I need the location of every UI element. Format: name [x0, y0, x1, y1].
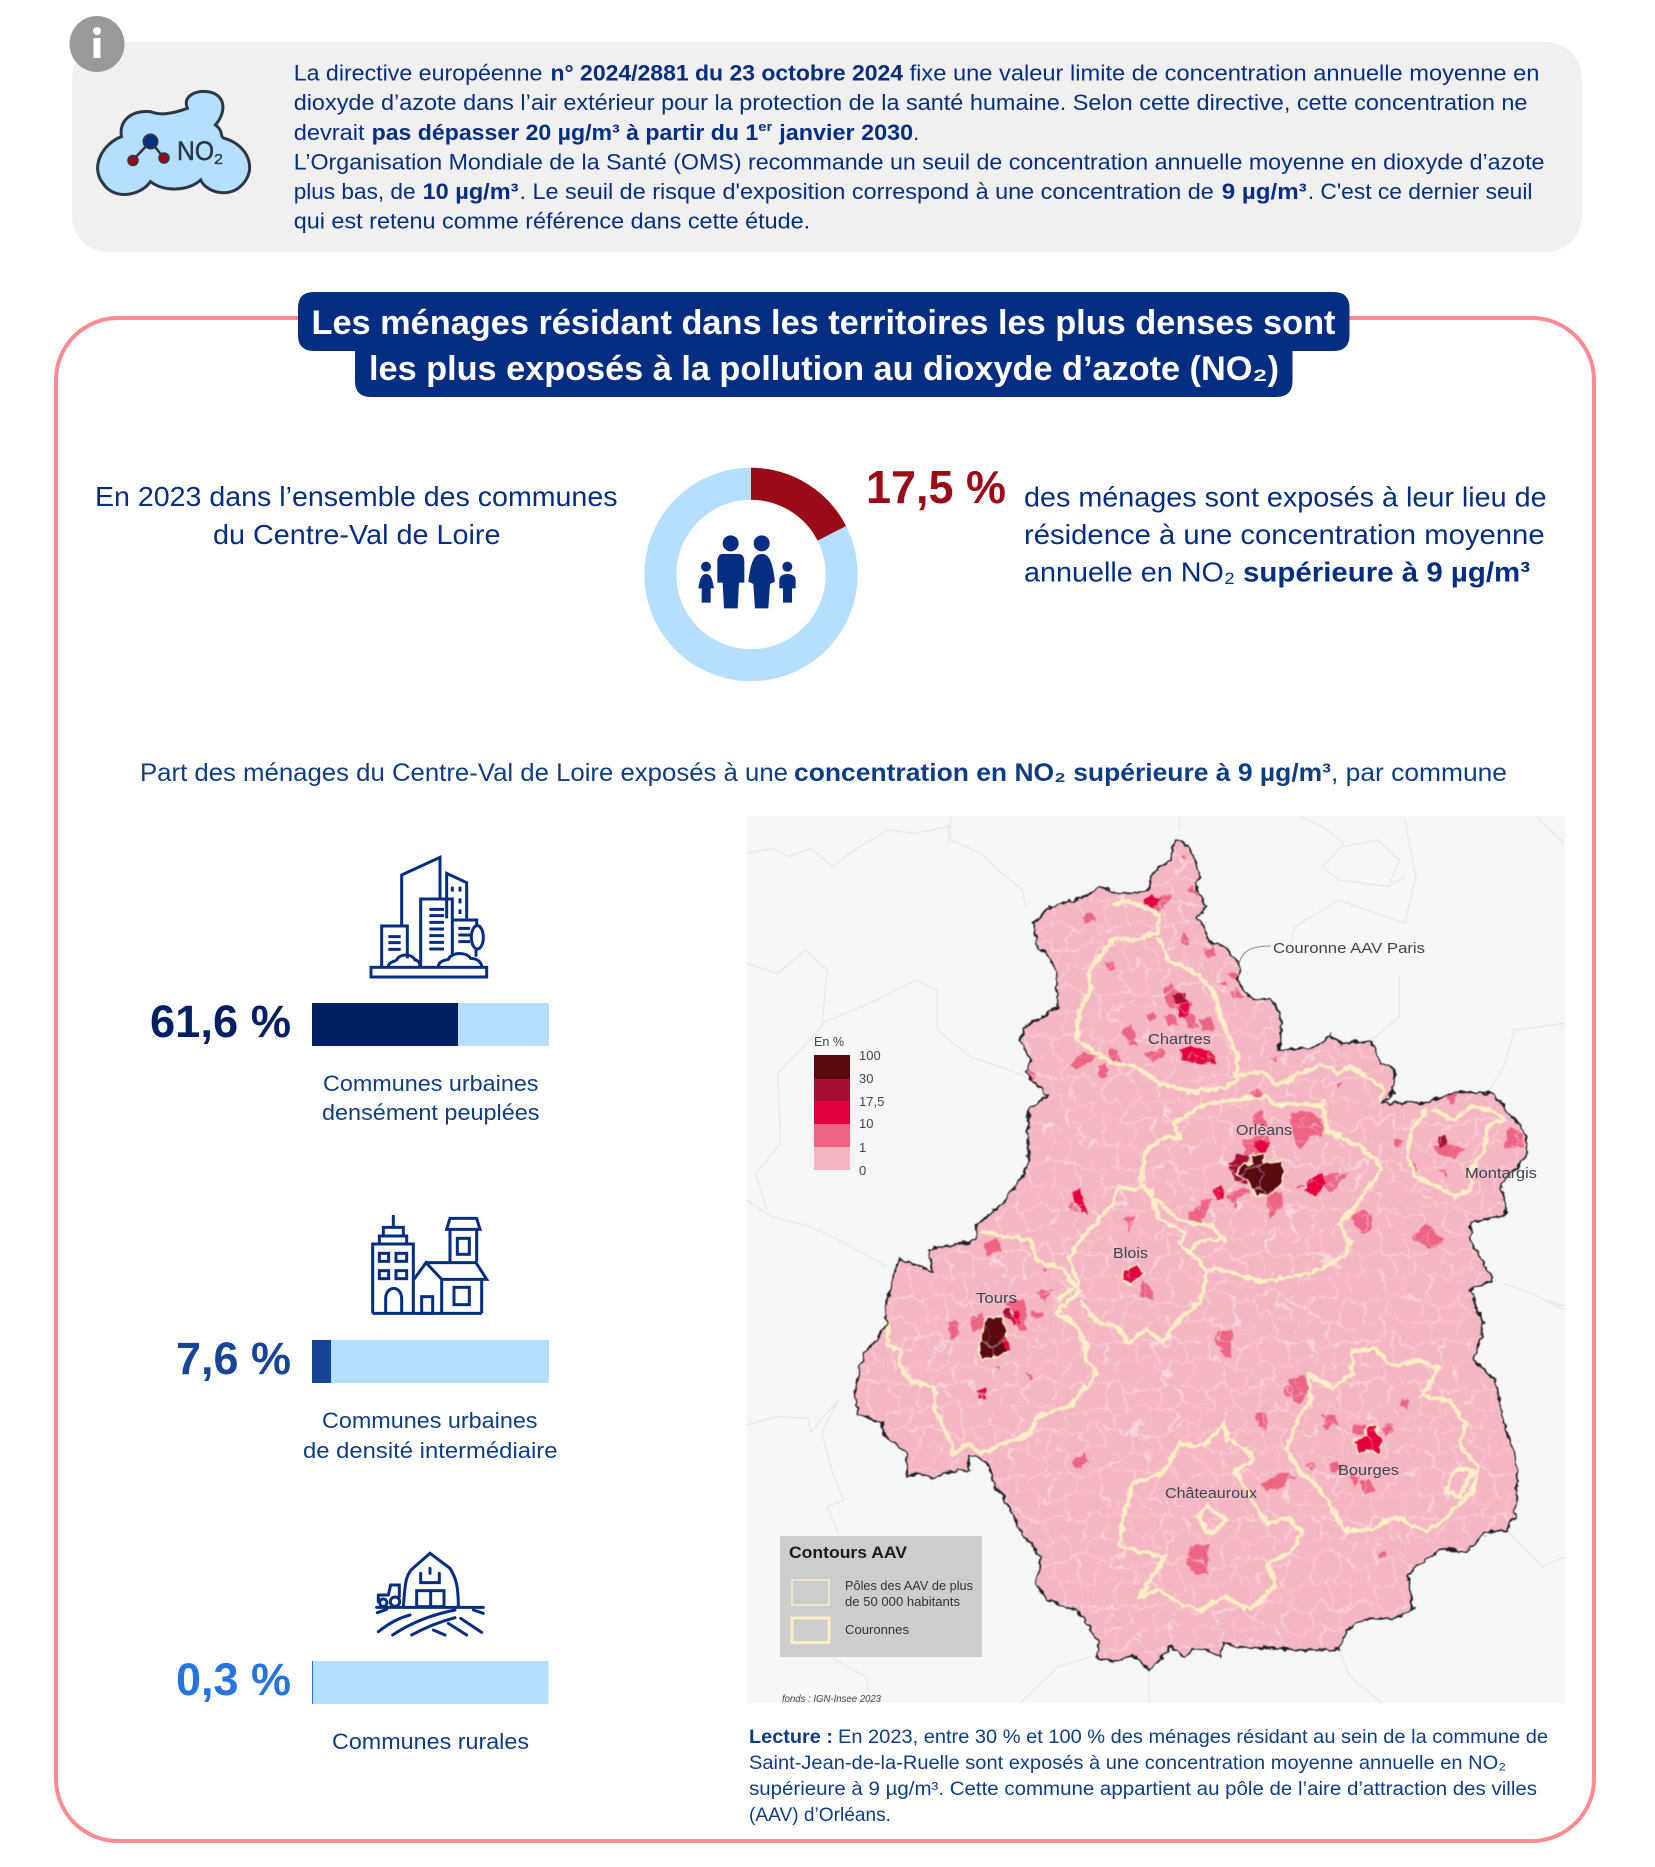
donut chart: 17.5 %: [660, 484, 842, 665]
text: exposure statement: résidence à une concentration moyenne: [1024, 519, 1545, 550]
text: directive explanation: qui est retenu comme référence dans cette étude.: [294, 208, 810, 234]
text: exposure statement: des ménages sont exposés à leur lieu de: [1024, 482, 1547, 512]
text: directive explanation: pas dépasser 20 µg/m³ à partir du 1: [372, 120, 758, 145]
label: Communes rurales: [332, 1729, 529, 1754]
city labels: Orléans: [1236, 1123, 1292, 1139]
map: communes of Centre-Val de Loire: [746, 816, 1565, 1705]
icon: NO2 cloud: NO: [177, 136, 214, 166]
title: les plus exposés à la pollution au dioxyde d’azote (NO₂): [369, 350, 1279, 388]
legend: AAV contours: Pôles des AAV de plus: [845, 1578, 973, 1593]
legend: percentage classes: En %: [814, 1034, 844, 1049]
icon: farm: [377, 1553, 483, 1635]
icon: family: [698, 535, 796, 608]
AAV contours: [888, 900, 1504, 1610]
callout: Couronne AAV Paris: Couronne AAV Paris: [1273, 941, 1425, 957]
legend: AAV contours: Contours AAV: [789, 1543, 908, 1562]
legend: AAV contours: [780, 1536, 982, 1657]
value: 7.6 %: 7,6 %: [176, 1333, 291, 1384]
text: reading note: [749, 1726, 1548, 1826]
bar: 7.6 %: [312, 1340, 549, 1383]
group: intermediate density communes: [176, 1215, 558, 1463]
icon: city: [371, 857, 487, 977]
city labels: Tours: [976, 1291, 1017, 1307]
text: directive explanation: L’Organisation Mondiale de la Santé (OMS) recommande un seuil de concentration annuelle moyenne en dioxyde d’azote: [294, 149, 1544, 175]
panel: main framed section: [56, 318, 1594, 1841]
text: directive explanation: [294, 60, 1544, 234]
label: Communes urbaines: [323, 1071, 538, 1096]
icon: NO2 cloud: [98, 91, 250, 194]
icon: NO2 cloud: 2: [214, 151, 223, 168]
text: regional context: [95, 481, 618, 550]
legend: percentage classes: 100: [859, 1048, 881, 1063]
text: directive explanation: .: [913, 120, 919, 145]
text: reading note: Saint-Jean-de-la-Ruelle sont exposés à une concentration moyenne annuelle en NO₂: [749, 1752, 1506, 1774]
legend: percentage classes: 17,5: [859, 1094, 884, 1109]
subheading: concentration en NO₂ supérieure à 9 µg/m³: [794, 759, 1331, 787]
city labels: Châteauroux: [1165, 1486, 1258, 1502]
text: regional context: En 2023 dans l’ensemble des communes: [95, 481, 618, 512]
text: directive explanation: er: [758, 119, 772, 134]
text: reading note: En 2023, entre 30 % et 100 % des ménages résidant au sein de la commune de: [838, 1726, 1548, 1748]
key figure: 17.5 %: 17,5 %: [866, 461, 1006, 513]
region border: [855, 839, 1526, 1670]
legend: percentage classes: [814, 1034, 884, 1178]
subheading: [140, 759, 1507, 787]
city labels: [976, 1032, 1537, 1502]
text: directive explanation: . C'est ce dernier seuil: [1308, 179, 1532, 204]
source note: fonds : IGN-Insee 2023: [782, 1694, 881, 1705]
city labels: Blois: [1113, 1246, 1148, 1262]
text: exposure statement: supérieure à 9 µg/m³: [1243, 556, 1530, 588]
text: directive explanation: 10 µg/m³: [423, 179, 518, 204]
bar: 61.6 %: [312, 1003, 549, 1046]
legend: AAV contours: Couronnes: [845, 1622, 909, 1637]
text: exposure statement: annuelle en NO₂: [1024, 556, 1235, 588]
text: directive explanation: dioxyde d’azote dans l’air extérieur pour la protection de la santé humaine. Selon cette directive, cette concentration ne: [294, 90, 1527, 115]
bar: 0.3 %: [312, 1661, 548, 1704]
city labels: Chartres: [1148, 1032, 1211, 1048]
group: dense urban communes: [150, 857, 549, 1125]
legend: percentage classes: 1: [859, 1140, 866, 1155]
text: reading note: (AAV) d’Orléans.: [749, 1804, 891, 1826]
legend: percentage classes: 0: [859, 1163, 866, 1178]
title: [298, 292, 1350, 397]
legend: AAV contours: de 50 000 habitants: [845, 1594, 960, 1609]
text: directive explanation: devrait: [294, 120, 365, 145]
label: [322, 1071, 540, 1125]
text: directive explanation: plus bas, de: [294, 179, 416, 204]
text: exposure statement: [1024, 482, 1547, 588]
label: Communes urbaines: [322, 1408, 538, 1433]
subheading: , par commune: [1331, 759, 1507, 787]
commune boundaries mesh: [858, 842, 1526, 1660]
title: Les ménages résidant dans les territoires les plus denses sont: [312, 304, 1336, 342]
label: [303, 1408, 558, 1463]
text: directive explanation: La directive européenne: [294, 60, 542, 86]
legend: percentage classes: 30: [859, 1071, 873, 1086]
region with communes, contours and border: [840, 820, 1550, 1700]
panel: information box: [70, 16, 1582, 252]
text: reading note: Lecture :: [749, 1726, 833, 1748]
text: directive explanation: n° 2024/2881 du 23 octobre 2024: [550, 60, 904, 86]
text: directive explanation: 9 µg/m³: [1222, 179, 1307, 204]
label: de densité intermédiaire: [303, 1438, 558, 1463]
value: 0.3 %: 0,3 %: [176, 1654, 291, 1705]
legend: percentage classes: 10: [859, 1116, 873, 1131]
text: reading note: supérieure à 9 µg/m³. Cette commune appartient au pôle de l’aire d’attraction des villes: [749, 1778, 1537, 1800]
text: directive explanation: janvier 2030: [778, 120, 913, 145]
text: regional context: du Centre-Val de Loire: [213, 519, 500, 550]
text: directive explanation: . Le seuil de risque d'exposition correspond à une concentration de: [519, 179, 1214, 204]
icon: info badge: [70, 16, 124, 72]
group: rural communes: [176, 1553, 548, 1754]
city labels: Bourges: [1338, 1463, 1399, 1479]
text: directive explanation: fixe une valeur limite de concentration annuelle moyenne en: [910, 60, 1539, 86]
icon: town: [373, 1215, 487, 1313]
value: 61.6 %: 61,6 %: [150, 996, 291, 1047]
region fill: [855, 839, 1526, 1670]
label: densément peuplées: [322, 1100, 540, 1125]
callout: Couronne AAV Paris: [1239, 941, 1425, 964]
communes exposed: classes: [947, 855, 1523, 1575]
city labels: Montargis: [1465, 1166, 1537, 1182]
subheading: Part des ménages du Centre-Val de Loire exposés à une: [140, 759, 788, 787]
